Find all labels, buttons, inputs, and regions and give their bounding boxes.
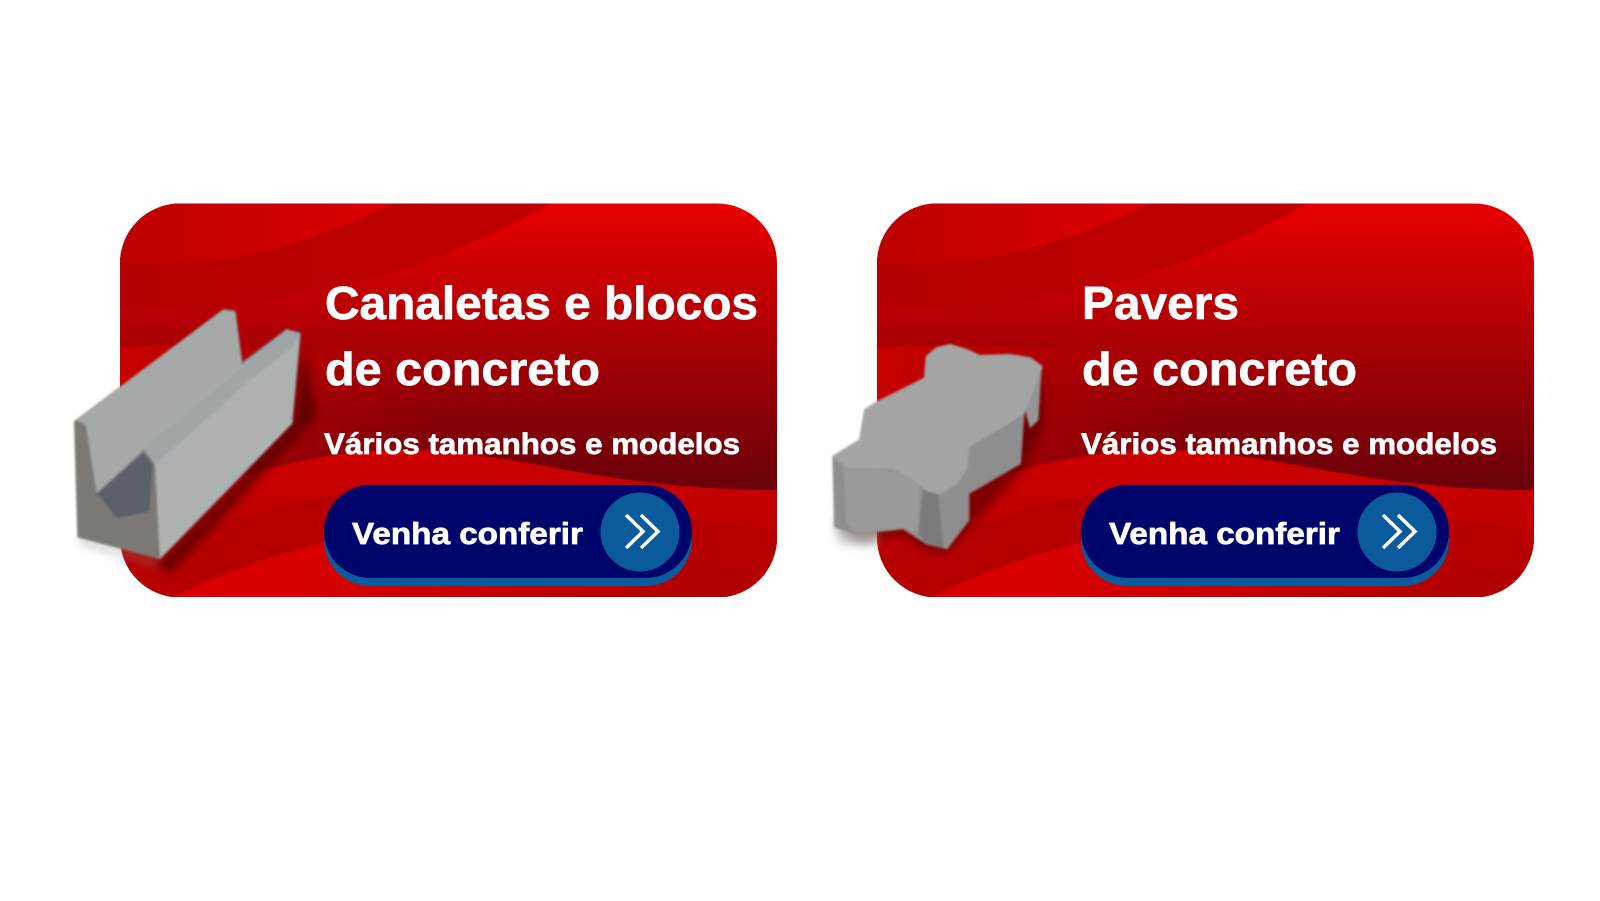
button [1081,485,1449,586]
card background [877,203,1534,597]
card: canaletas e blocos [75,203,777,597]
card: pavers [833,203,1534,597]
icon: interlocking paver [833,345,1047,553]
icon: double chevron [600,492,680,572]
subheading: Vários tamanhos e modelos [324,428,740,461]
heading: de concreto [1082,343,1357,395]
icon: concrete channel block [75,310,317,573]
card background [120,203,777,597]
heading: Pavers [1082,277,1239,329]
subheading: Vários tamanhos e modelos [1081,428,1497,461]
button label: Venha conferir [352,516,583,551]
heading: de concreto [325,343,600,395]
button [324,485,692,586]
heading: Canaletas e blocos [325,277,758,329]
button label: Venha conferir [1109,516,1340,551]
icon: double chevron [1358,492,1436,572]
heading [325,277,758,395]
heading [1082,277,1357,395]
